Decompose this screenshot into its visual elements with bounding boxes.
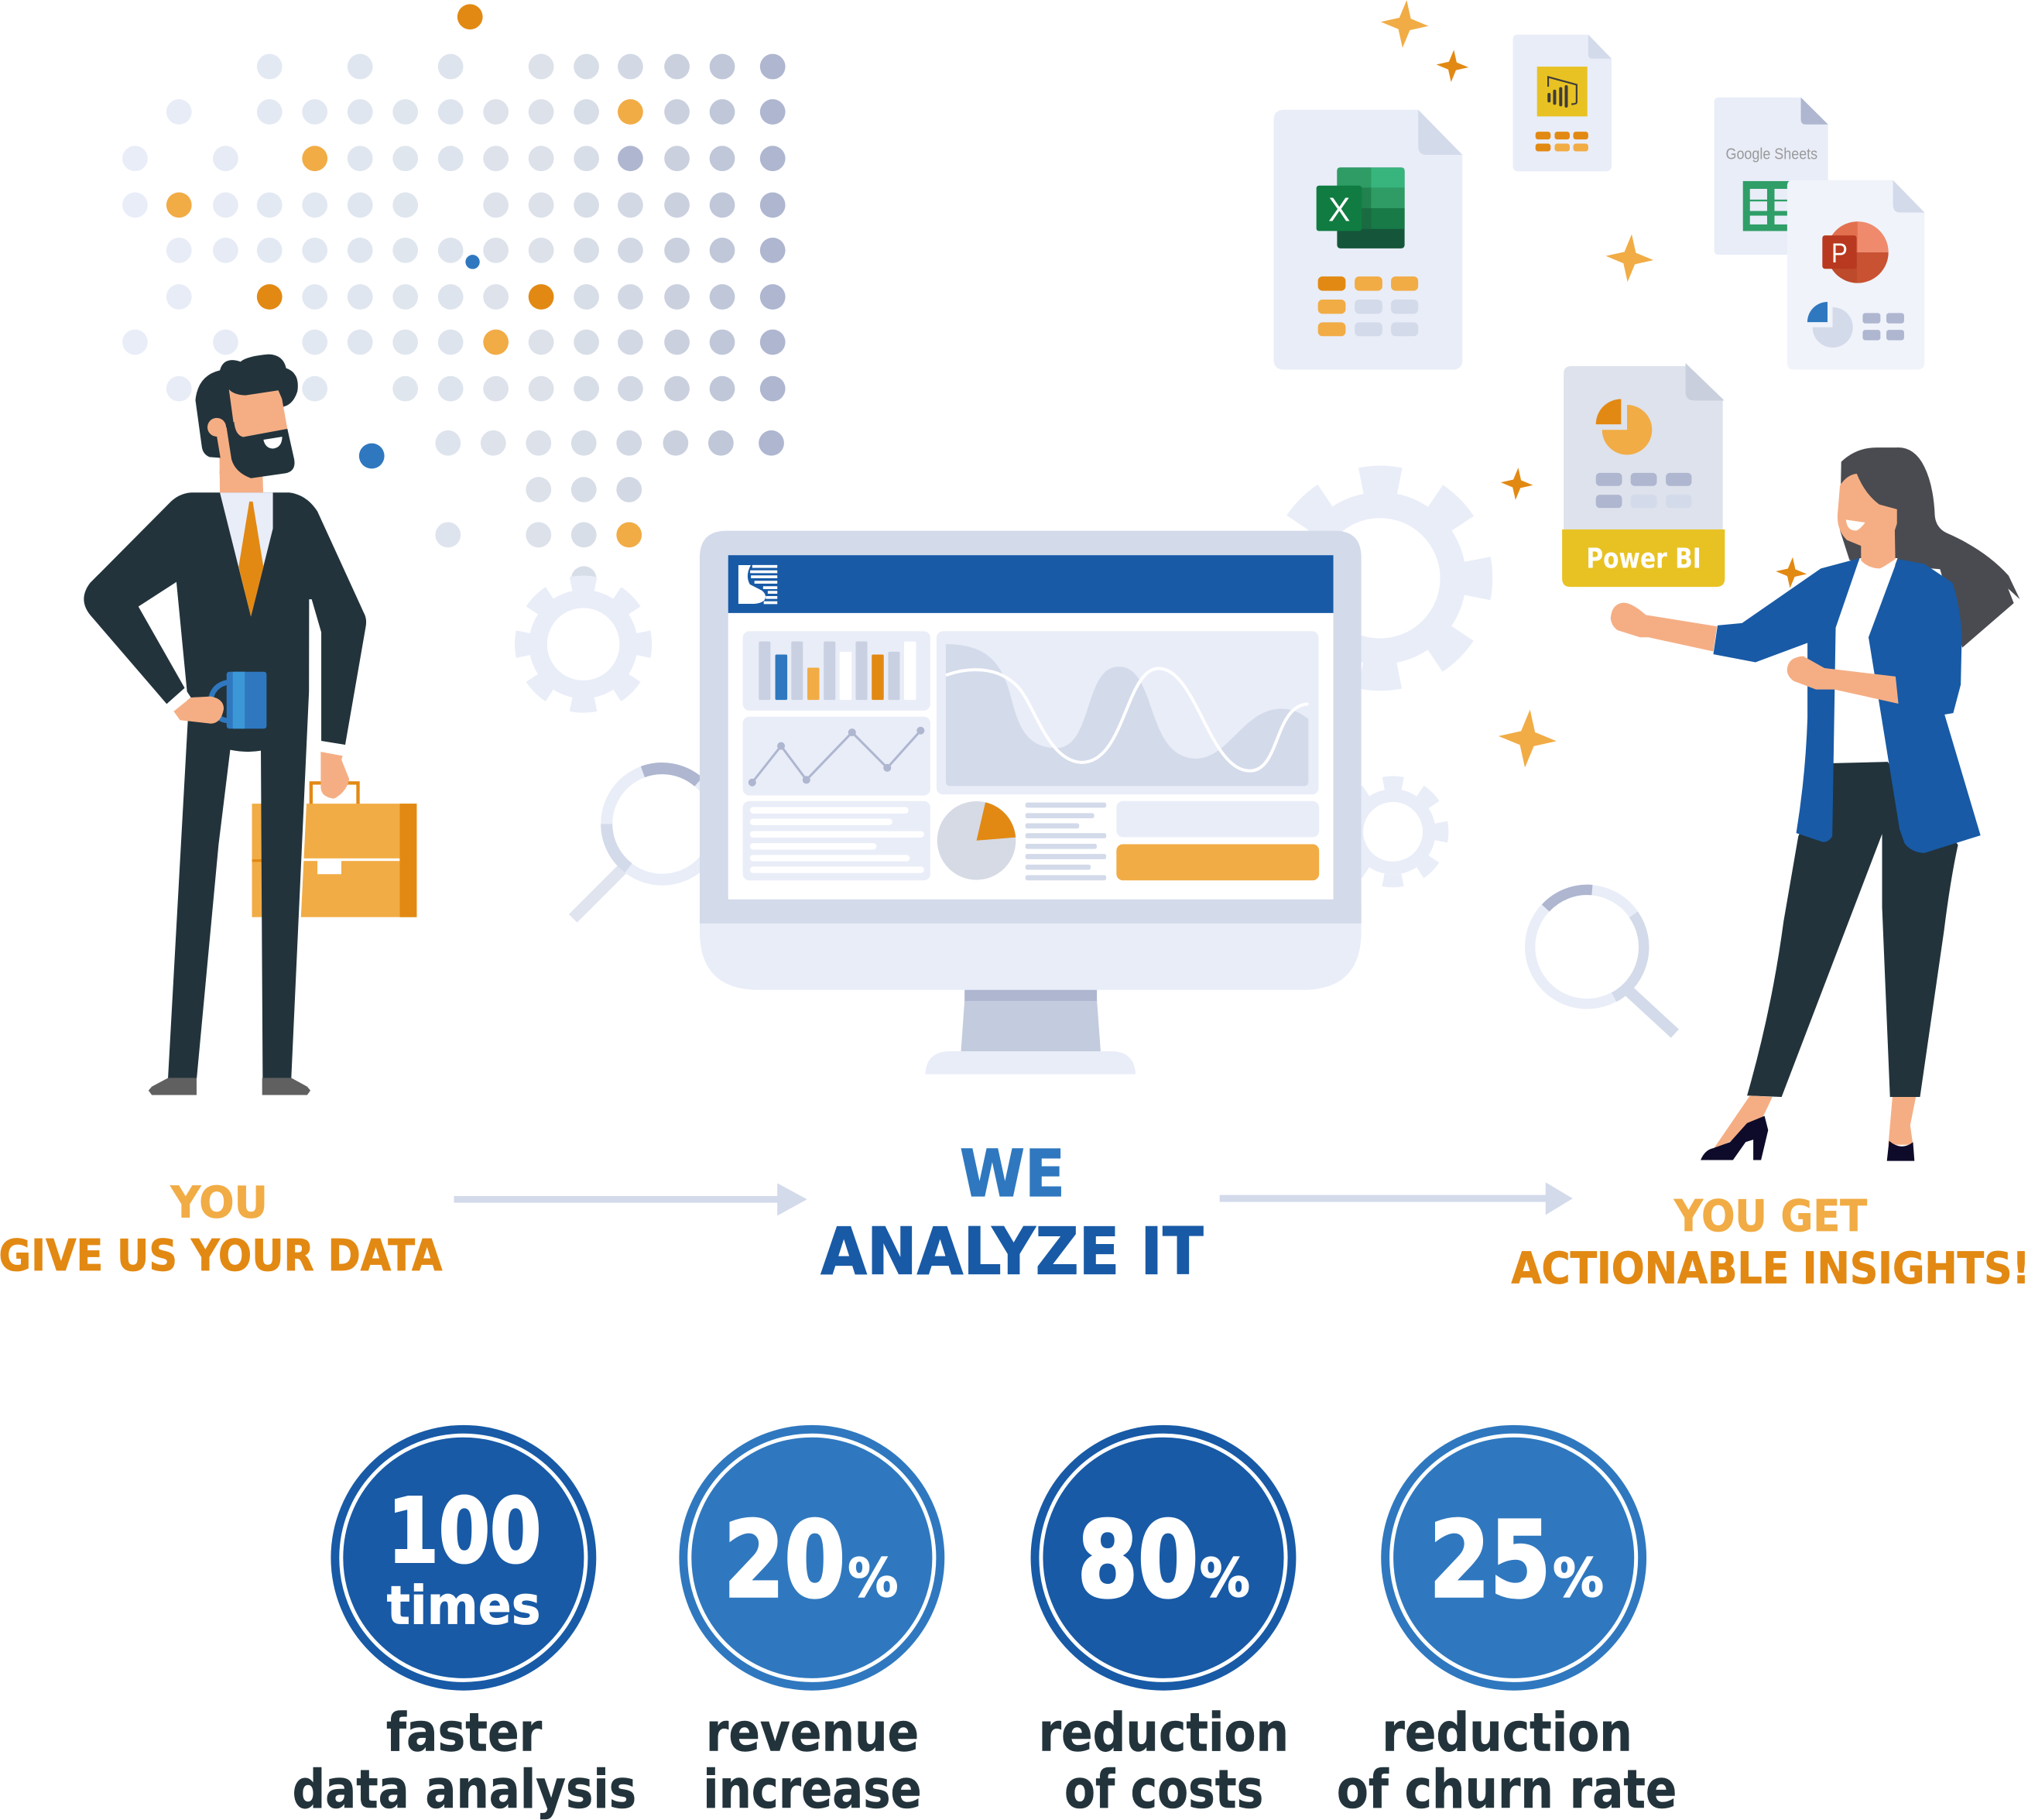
tie — [238, 502, 263, 616]
panel: line chart — [743, 717, 930, 796]
screen header bar — [728, 555, 1334, 613]
Power BI label: Power BI — [1586, 543, 1701, 575]
stat: 20% revenue increase: revenue — [706, 1702, 919, 1764]
stat: 80% reduction of costs: % — [1200, 1548, 1250, 1609]
gears behind the monitor — [522, 479, 1479, 881]
shirt — [220, 492, 273, 616]
stat: 20% revenue increase — [679, 1425, 944, 1820]
document: PowerPoint — [1787, 180, 1924, 370]
stat: 25% reduction of churn rate: of churn rate — [1337, 1759, 1677, 1820]
document: small Power BI — [1512, 35, 1612, 171]
data cells — [1536, 132, 1588, 152]
document: large Power BI — [1562, 363, 1725, 587]
logo — [738, 565, 777, 604]
pie chart — [937, 801, 1016, 880]
icon: Power BI — [1537, 67, 1588, 116]
icon: PowerPoint: P — [1831, 238, 1848, 269]
icon: sheets grid — [1743, 181, 1792, 231]
panel: orange card — [1116, 844, 1319, 880]
monitor body — [700, 531, 1362, 990]
sparkles — [1379, 0, 1808, 770]
monitor — [700, 531, 1362, 1075]
stat: 20% revenue increase: 20 — [724, 1499, 845, 1621]
panel: text lines — [743, 801, 930, 880]
stat: 100 times faster data analysis: times — [387, 1575, 540, 1637]
icon: left magnifier — [573, 769, 718, 918]
right hand — [320, 752, 349, 799]
hair — [1840, 447, 2019, 648]
stat: 20% revenue increase: % — [848, 1548, 898, 1609]
dot field — [122, 4, 786, 591]
data cells — [1862, 313, 1904, 340]
data cells — [1596, 473, 1691, 508]
arrow: we to you get — [1220, 1182, 1573, 1215]
woman presenting — [1611, 447, 2019, 1161]
shoes — [1701, 1116, 1914, 1161]
stat: 25% reduction of churn rate — [1337, 1425, 1677, 1820]
head — [195, 355, 298, 492]
step label: you get actionable insights — [1511, 1191, 2028, 1294]
jacket — [1713, 558, 1981, 853]
arrow: you to we — [454, 1183, 807, 1215]
icon: Excel — [1317, 167, 1405, 248]
legs — [1713, 1095, 1916, 1149]
stat: 100 times faster data analysis: data analysis — [293, 1759, 636, 1820]
shoes — [149, 1078, 310, 1095]
legend lines — [1026, 803, 1106, 880]
man with briefcase and mug — [84, 355, 416, 1095]
stat: 100 times faster data analysis: 100 — [387, 1479, 541, 1583]
stat: 100 times faster data analysis: faster — [386, 1702, 542, 1764]
icon: right magnifier — [1530, 889, 1675, 1033]
suit — [84, 492, 366, 1078]
stat: 25% reduction of churn rate: % — [1553, 1548, 1604, 1609]
icon: PowerPoint — [1822, 221, 1889, 283]
step label: you give us your data: GIVE US YOUR DATA — [0, 1231, 443, 1281]
stat: 80% reduction of costs: of costs — [1064, 1759, 1263, 1820]
pie icon — [1596, 399, 1652, 455]
bent arm — [1787, 656, 1899, 704]
stat: 25% reduction of churn rate: 25 — [1429, 1499, 1550, 1621]
right cuff — [320, 741, 345, 756]
left cuff — [166, 688, 191, 711]
stat: 100 times faster data analysis — [293, 1425, 636, 1820]
label: Google Sheets: Google Sheets — [1726, 146, 1817, 163]
step label: we analyze it: WE — [960, 1136, 1065, 1212]
stat: 25% reduction of churn rate: reduction — [1382, 1702, 1632, 1764]
stat: 80% reduction of costs: reduction — [1039, 1702, 1289, 1764]
left hand — [173, 697, 224, 724]
face — [1838, 474, 1897, 568]
stat: 80% reduction of costs — [1031, 1425, 1296, 1820]
t-shirt — [1833, 558, 1898, 763]
document: Excel — [1274, 110, 1462, 370]
panel: bar chart — [743, 631, 930, 711]
stat: 80% reduction of costs: 80 — [1077, 1499, 1198, 1621]
mug — [211, 672, 266, 728]
pie icon — [1807, 302, 1853, 348]
trousers — [1747, 762, 1958, 1097]
Power BI label — [1562, 530, 1725, 587]
icon: Excel: X — [1328, 192, 1350, 229]
monitor stand — [926, 989, 1136, 1075]
briefcase — [252, 783, 416, 917]
step label: we analyze it — [820, 1136, 1204, 1290]
document: Google Sheets — [1715, 98, 1828, 255]
panel: blank card — [1116, 801, 1319, 837]
step label: you get actionable insights: YOU GET — [1673, 1191, 1867, 1242]
smile — [1846, 519, 1865, 530]
step label: you give us your data: YOU — [170, 1178, 268, 1229]
outstretched arm — [1611, 602, 1717, 651]
step label: you give us your data — [0, 1178, 443, 1281]
panel: area chart — [937, 631, 1319, 794]
stat: 20% revenue increase: increase — [703, 1759, 922, 1820]
monitor screen — [728, 555, 1334, 900]
data cells — [1318, 276, 1418, 336]
step label: we analyze it: ANALYZE IT — [820, 1214, 1204, 1290]
